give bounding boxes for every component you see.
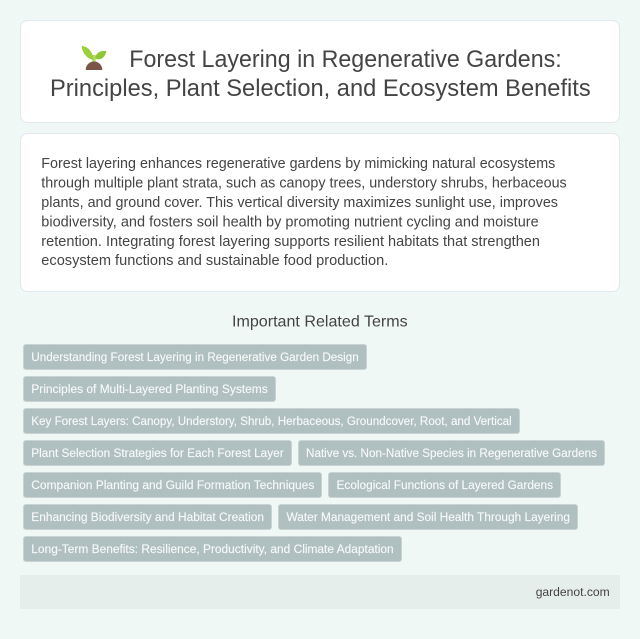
tag: multi-layered planting <box>24 376 276 402</box>
tag: biodiversity <box>24 504 272 530</box>
tag: native species: Native vs. Non-Native Species in Regenerative Gardens <box>306 446 597 460</box>
tag: understanding forest layering <box>24 344 366 370</box>
text block: description: ecosystem functions and sustainable food production. <box>41 253 388 269</box>
text block: description: Forest layering enhances regenerative gardens by mimicking natural ecosystems <box>41 156 555 172</box>
panel: title card <box>20 20 620 122</box>
tag: biodiversity: Enhancing Biodiversity and Habitat Creation <box>31 510 264 524</box>
text block: description: through multiple plant strata, such as canopy trees, understory shrubs, herbaceous <box>41 176 567 192</box>
tag: ecological functions <box>328 472 560 498</box>
tag: plant selection <box>24 440 292 466</box>
tag: companion planting: Companion Planting and Guild Formation Techniques <box>31 478 314 492</box>
title <box>50 46 591 102</box>
tag: companion planting <box>24 472 322 498</box>
icon: sprout <box>82 46 106 70</box>
footer: gardenot.com <box>536 585 610 599</box>
tag: long-term benefits <box>24 536 402 562</box>
title: Principles, Plant Selection, and Ecosystem Benefits <box>50 75 591 102</box>
tag: native species <box>298 440 604 466</box>
tag: multi-layered planting: Principles of Multi-Layered Planting Systems <box>31 382 268 396</box>
text block: description: biodiversity, and fosters soil health by promoting nutrient cycling and moisture <box>41 214 539 230</box>
footer <box>20 575 620 609</box>
text block: description: retention. Integrating forest layering supports resilient habitats that strengthen <box>41 234 540 250</box>
panel: description <box>20 134 620 292</box>
text block: description: plants, and ground cover. This vertical diversity maximizes sunlight use, improves <box>41 195 558 211</box>
tag: key forest layers: Key Forest Layers: Canopy, Understory, Shrub, Herbaceous, Groundcover, Root, and Vertical <box>31 414 512 428</box>
tag: understanding forest layering: Understanding Forest Layering in Regenerative Garden Design <box>31 350 359 364</box>
tag: key forest layers <box>24 408 520 434</box>
tag: plant selection: Plant Selection Strategies for Each Forest Layer <box>31 446 284 460</box>
heading: related terms: Important Related Terms <box>232 314 408 331</box>
title: Forest Layering in Regenerative Gardens: <box>129 46 562 73</box>
tag: water management <box>278 504 578 530</box>
tag: water management: Water Management and Soil Health Through Layering <box>286 510 570 524</box>
tag: ecological functions: Ecological Functions of Layered Gardens <box>336 478 553 492</box>
text block: description <box>41 156 567 269</box>
tag: long-term benefits: Long-Term Benefits: Resilience, Productivity, and Climate Adaptation <box>31 542 394 556</box>
